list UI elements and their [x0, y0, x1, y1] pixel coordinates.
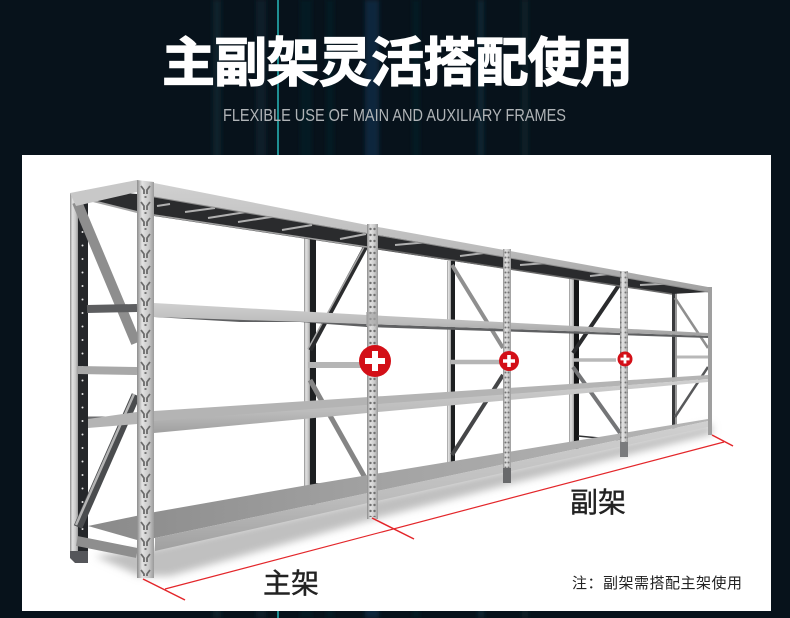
note: 注：副架需搭配主架使用	[572, 575, 742, 592]
panel: white product area	[22, 155, 771, 611]
third shelf	[88, 375, 708, 433]
dimension lines: red	[143, 435, 733, 600]
floor shadow	[95, 424, 712, 576]
front posts	[70, 180, 712, 578]
label: auxiliary frame: 副架	[570, 487, 626, 518]
back posts	[70, 193, 677, 551]
illustration: steel shelving rack	[70, 180, 712, 578]
second shelf	[154, 303, 708, 338]
icon: small plus	[618, 352, 632, 366]
title: 主副架灵活搭配使用	[162, 34, 633, 93]
top shelf	[70, 180, 708, 294]
icon: medium plus	[499, 351, 519, 371]
label: main frame: 主架	[263, 568, 319, 599]
icon: large plus	[359, 345, 391, 377]
bottom shelf	[88, 419, 708, 551]
side frame braces and cross bars	[76, 202, 708, 553]
subtitle: FLEXIBLE USE OF MAIN AND AUXILIARY FRAMES	[223, 105, 566, 125]
